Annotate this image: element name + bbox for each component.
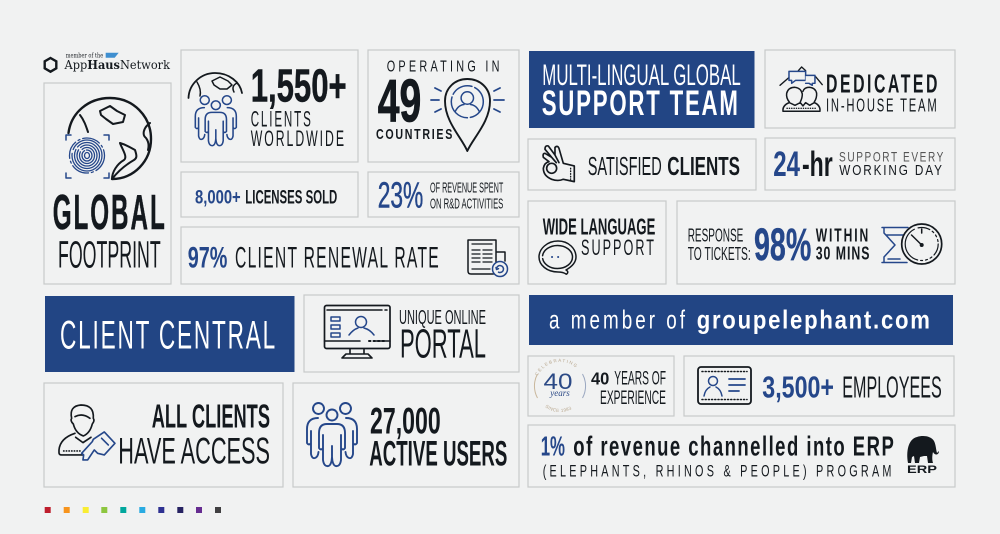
panel: global footprint <box>44 83 171 284</box>
panel: response to tickets <box>677 201 955 284</box>
icon: 40 years badge: years <box>549 388 570 398</box>
panel: 1,550+ clients worldwide <box>181 50 358 162</box>
panel: 24-hr support <box>765 138 955 190</box>
icon: people <box>307 403 357 466</box>
colour swatches <box>45 507 221 513</box>
stat: 97%: 97% <box>188 241 227 274</box>
label: ACTIVE USERS: ACTIVE USERS <box>369 435 507 474</box>
logo: AppHaus Network: AppHausNetwork <box>64 57 170 72</box>
label: WIDE LANGUAGE: WIDE LANGUAGE <box>543 213 655 239</box>
panel: ERP program <box>528 425 955 487</box>
panel: operating in 49 countries <box>368 50 519 162</box>
label: a member of: a member of <box>549 304 688 334</box>
icon: 40 years badge: CELEBRATING <box>535 358 577 376</box>
label: COUNTRIES: COUNTRIES <box>376 126 454 143</box>
banner: multi-lingual global support team <box>529 51 754 128</box>
label: WITHIN: WITHIN <box>816 225 870 246</box>
icon: ID card <box>698 367 751 404</box>
panel: revenue on R&D: OF REVENUE SPENT <box>430 179 503 196</box>
icon: OK hand <box>543 146 574 182</box>
stat: 27,000: 27,000 <box>370 400 441 441</box>
label: CLIENT RENEWAL RATE: CLIENT RENEWAL RATE <box>235 241 440 274</box>
banner: member of groupelephant.com <box>529 295 953 345</box>
stat: 40: 40 <box>591 368 610 388</box>
panel: satisfied clients <box>528 139 756 190</box>
label: SUPPORT: SUPPORT <box>581 235 656 260</box>
icon: ERP elephant <box>907 436 939 476</box>
stat: 24: 24 <box>773 145 800 184</box>
panel: 3,500+ employees <box>684 356 954 416</box>
stat: 49: 49 <box>378 67 421 135</box>
label: WORKING DAY: WORKING DAY <box>839 162 944 179</box>
panel: 27,000 active users <box>293 383 519 487</box>
heading: SUPPORT TEAM: SUPPORT TEAM <box>542 84 740 123</box>
label: YEARS OF: YEARS OF <box>614 368 666 389</box>
stat: 1%: 1% <box>541 431 565 462</box>
panel: licenses sold <box>181 172 358 217</box>
label: HAVE ACCESS: HAVE ACCESS <box>118 430 270 471</box>
panel: wide language support <box>528 201 666 284</box>
icon: 40 years badge: SINCE 1983 <box>546 404 572 412</box>
logo: AppHaus Network <box>45 52 170 72</box>
stat: 98%: 98% <box>754 219 811 270</box>
label: groupelephant.com: groupelephant.com <box>697 304 932 334</box>
panel: client renewal rate <box>181 227 519 284</box>
panel: global footprint: GLOBAL <box>53 186 167 240</box>
logo: AppHaus Network: member of the <box>66 52 104 59</box>
label: TO TICKETS: TO TICKETS: <box>688 243 751 264</box>
icon: 40 years badge <box>534 358 586 412</box>
label: LICENSES SOLD: LICENSES SOLD <box>245 186 337 208</box>
heading: CLIENT CENTRAL: CLIENT CENTRAL <box>60 313 277 357</box>
icon: user with key <box>59 405 115 460</box>
heading: MULTI-LINGUAL GLOBAL: MULTI-LINGUAL GLOBAL <box>542 59 741 92</box>
label: PORTAL: PORTAL <box>400 321 486 367</box>
label: OPERATING IN: OPERATING IN <box>387 59 503 76</box>
label: 30 MINS: 30 MINS <box>816 243 870 264</box>
label: SUPPORT EVERY: SUPPORT EVERY <box>839 149 945 165</box>
label: SATISFIED: SATISFIED <box>588 153 662 181</box>
label: CLIENTS: CLIENTS <box>251 107 313 132</box>
stat: 3,500+: 3,500+ <box>762 369 834 404</box>
icon: speech bubble <box>539 241 576 274</box>
label: CLIENTS: CLIENTS <box>667 153 740 181</box>
icon: location pin <box>431 79 504 151</box>
panel: unique online portal <box>304 295 519 372</box>
label: RESPONSE: RESPONSE <box>688 225 743 246</box>
icon: monitor with user <box>324 306 390 358</box>
label: UNIQUE ONLINE: UNIQUE ONLINE <box>399 306 486 329</box>
icon: ERP elephant: ERP <box>907 464 937 476</box>
icon: team with speech boxes <box>780 67 822 111</box>
banner: client central <box>45 296 294 372</box>
stat: 8,000+: 8,000+ <box>195 186 241 208</box>
panel: revenue on R&D <box>368 172 519 217</box>
label: ON R&D ACTIVITIES: ON R&D ACTIVITIES <box>430 195 503 212</box>
label: ALL CLIENTS: ALL CLIENTS <box>152 398 270 435</box>
panel: dedicated in-house team <box>765 50 955 128</box>
panel: 40 years of experience <box>527 355 675 417</box>
stat: 23%: 23% <box>378 175 423 216</box>
icon: hourglass and clock <box>882 224 942 264</box>
label: EXPERIENCE: EXPERIENCE <box>600 387 666 409</box>
icon: 40 years badge: 40 <box>544 369 572 394</box>
panel: all clients have access <box>44 383 283 487</box>
icon: globe with fingerprint <box>66 98 151 179</box>
icon: globe and people <box>188 73 242 146</box>
label: WORLDWIDE: WORLDWIDE <box>251 126 346 151</box>
icon: report <box>468 240 508 276</box>
stat: -hr: -hr <box>802 145 833 184</box>
stat: 1,550+: 1,550+ <box>251 60 347 112</box>
panel: global footprint: FOOTPRINT <box>58 234 161 276</box>
